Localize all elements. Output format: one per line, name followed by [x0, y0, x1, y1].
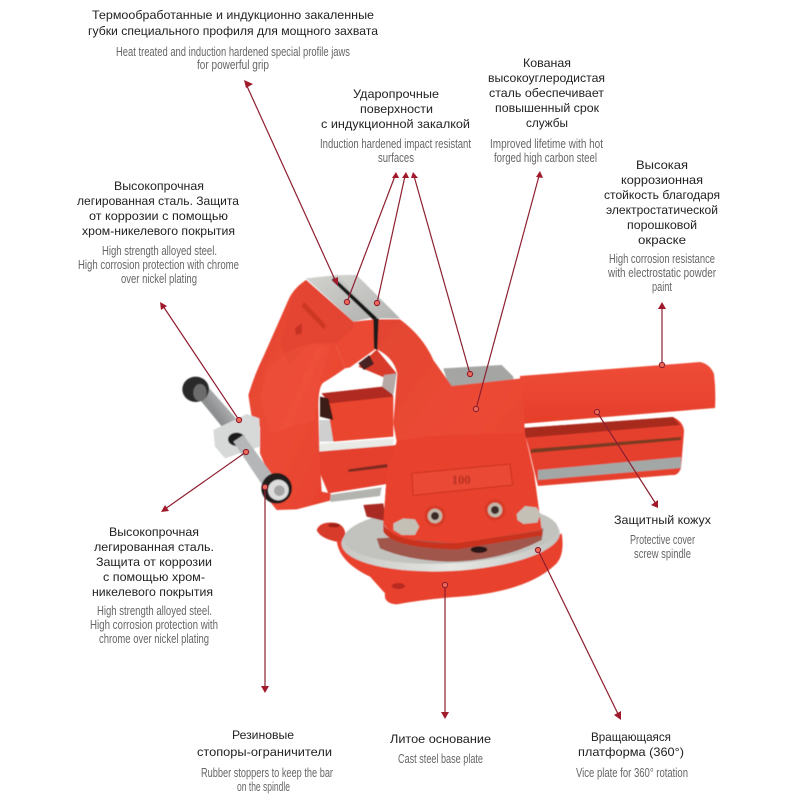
vice: tommy bar handle: [182, 377, 292, 504]
text block: forged steel: службы: [526, 116, 568, 130]
text block: forged steel: [488, 56, 605, 165]
text block: corrosion resistance: окраске: [638, 233, 686, 247]
vice: bolts: [393, 499, 541, 535]
text block: impact surfaces: с индукционной закалкой: [321, 117, 470, 131]
arrow: protective cover: [594, 409, 658, 508]
text block: alloyed steel upper: Высокопрочная: [114, 179, 204, 193]
text block: rubber stoppers: Резиновые: [232, 728, 294, 742]
text block: corrosion resistance: paint: [652, 280, 672, 294]
text block: corrosion resistance: with electrostatic powder: [607, 266, 716, 280]
text block: protective cover: Protective cover: [630, 533, 695, 547]
vice: swivel base: [317, 499, 563, 604]
text block: alloyed steel lower: легированная сталь.: [94, 540, 214, 554]
text block: hardened jaws: Термообработанные и индукционно закаленные: [92, 8, 374, 22]
arrow: forged steel: [473, 171, 543, 412]
text block: alloyed steel lower: Защита от коррозии: [96, 555, 212, 569]
arrow: jaws: [244, 80, 338, 286]
text block: forged steel: Improved lifetime with hot: [490, 137, 603, 151]
text block: rotating platform: платформа (360°): [578, 745, 684, 759]
text block: impact surfaces: Ударопрочные: [353, 87, 439, 101]
arrow: alloyed steel top: [160, 302, 242, 423]
text block: hardened jaws: for powerful grip: [197, 58, 269, 72]
text block: corrosion resistance: порошковой: [627, 218, 697, 232]
text block: alloyed steel upper: хром-никелевого покрытия: [82, 224, 235, 238]
text block: hardened jaws: Heat treated and induction hardened special profile jaws: [116, 45, 350, 59]
text block: forged steel: повышенный срок: [495, 101, 600, 115]
text block: alloyed steel upper: [77, 179, 239, 286]
text block: cast base: [390, 732, 491, 766]
vice: protective cover handle: [520, 362, 715, 424]
text block: hardened jaws: [88, 8, 378, 72]
text block: cast base: Cast steel base plate: [398, 752, 483, 766]
text block: cast base: Литое основание: [390, 732, 491, 746]
text block: alloyed steel lower: [90, 525, 218, 646]
text block: alloyed steel lower: Высокопрочная: [109, 525, 199, 539]
text block: alloyed steel lower: chrome over nickel plating: [99, 632, 209, 646]
text block: alloyed steel lower: с помощью хром-: [103, 570, 205, 584]
text block: impact surfaces: surfaces: [378, 151, 414, 165]
arrow: alloyed steel bottom: [161, 449, 249, 512]
text block: protective cover: Защитный кожух: [614, 513, 711, 527]
text block: rubber stoppers: Rubber stoppers to keep the bar: [201, 766, 333, 780]
text block: alloyed steel lower: High strength alloyed steel.: [97, 604, 212, 618]
text block: corrosion resistance: коррозионная: [621, 173, 703, 187]
arrow: base plate: [441, 582, 449, 719]
arrow: impact surface left: [344, 172, 399, 305]
arrow: rubber stoppers: [261, 484, 269, 693]
text block: rubber stoppers: [197, 728, 333, 794]
text block: protective cover: screw spindle: [634, 547, 691, 561]
text block: impact surfaces: поверхности: [360, 102, 433, 116]
text block: rotating platform: Vice plate for 360° rotation: [576, 766, 688, 780]
text block: impact surfaces: [320, 87, 471, 165]
text block: alloyed steel upper: легированная сталь. Защита: [77, 194, 239, 208]
embossed size marking: 100: [452, 473, 471, 487]
text block: corrosion resistance: Высокая: [636, 158, 688, 172]
text block: rubber stoppers: on the spindle: [237, 780, 290, 794]
vice: screw and slide bars: [318, 386, 397, 502]
text block: alloyed steel lower: никелевого покрытия: [92, 585, 213, 599]
text block: alloyed steel lower: High corrosion protection with: [90, 618, 218, 632]
text block: corrosion resistance: High corrosion resistance: [609, 252, 715, 266]
text block: alloyed steel upper: over nickel plating: [121, 272, 197, 286]
text block: corrosion resistance: [604, 158, 720, 294]
text block: impact surfaces: Induction hardened impact resistant: [320, 137, 471, 151]
text block: alloyed steel upper: High corrosion protection with chrome: [78, 258, 239, 272]
text block: protective cover: [614, 513, 711, 561]
text block: rotating platform: [576, 730, 688, 780]
arrow: rotating platform: [535, 547, 621, 720]
vice: moving front jaw: [248, 275, 377, 510]
arrow: impact surface rear: [411, 172, 473, 377]
arrow: powder coating: [658, 302, 666, 368]
text block: rotating platform: Вращающаяся: [591, 730, 671, 744]
text block: forged steel: высокоуглеродистая: [488, 71, 605, 85]
text block: alloyed steel upper: от коррозии с помощью: [89, 209, 228, 223]
text block: forged steel: сталь обеспечивает: [489, 86, 605, 100]
text block: forged steel: forged high carbon steel: [494, 151, 597, 165]
text block: corrosion resistance: стойкость благодаря: [604, 188, 720, 202]
text block: hardened jaws: губки специального профиля для мощного захвата: [88, 24, 378, 38]
text block: corrosion resistance: электростатической: [606, 203, 718, 217]
text block: rubber stoppers: стопоры-ограничители: [197, 745, 332, 759]
text block: forged steel: Кованая: [523, 56, 571, 70]
vice: fixed rear jaw and body: [332, 275, 543, 549]
illustration: red bench vice: [182, 275, 715, 604]
vice: rear guide rail: [523, 417, 684, 486]
arrow: impact surface centre: [374, 172, 409, 306]
text block: alloyed steel upper: High strength alloyed steel.: [102, 244, 217, 258]
